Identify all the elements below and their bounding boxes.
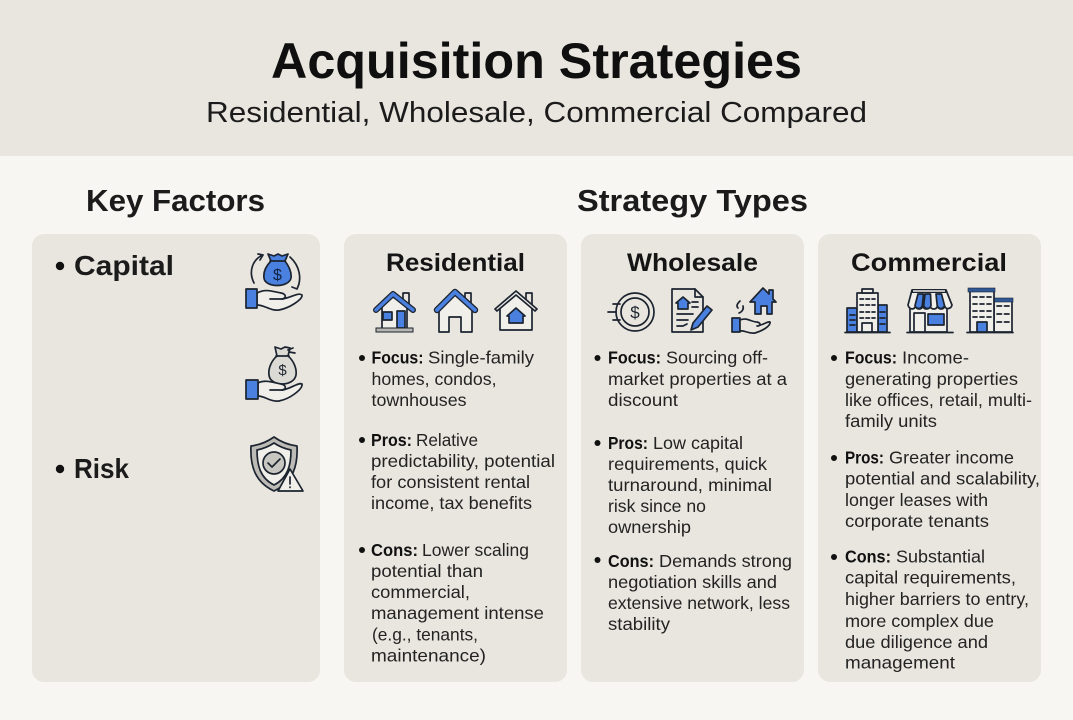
list: wholesale: ownership xyxy=(608,517,691,537)
icon: money bag over hand xyxy=(246,347,302,401)
list: residential: Focus: xyxy=(372,348,424,368)
factor: risk: Risk xyxy=(74,453,129,484)
list: commercial: Cons: xyxy=(845,546,891,566)
heading: residential: Residential xyxy=(386,249,525,277)
title: Acquisition Strategies xyxy=(271,33,802,89)
list: wholesale: requirements, quick xyxy=(608,454,767,474)
list: commercial: Focus: xyxy=(845,348,897,368)
list: commercial: management xyxy=(845,652,955,672)
list: wholesale: Sourcing off- xyxy=(666,348,768,368)
icon: house in hand xyxy=(732,288,776,333)
list: commercial: more complex due xyxy=(845,611,994,631)
factor: capital: Capital xyxy=(74,250,174,281)
subtitle: Residential, Wholesale, Commercial Compared xyxy=(206,97,867,129)
list: wholesale: turnaround, minimal xyxy=(608,475,772,495)
list: commercial: family units xyxy=(845,411,937,431)
list: commercial: Greater income xyxy=(889,448,1014,468)
list: residential: Cons: xyxy=(371,540,418,560)
list: residential: (e.g., tenants, xyxy=(372,624,478,644)
list: residential xyxy=(359,348,555,666)
icon: house three xyxy=(495,291,537,330)
icon: house one xyxy=(376,293,413,332)
list: residential: Relative xyxy=(416,430,478,450)
list: residential: management intense xyxy=(371,603,544,623)
list: residential: Single-family xyxy=(428,348,534,368)
list: wholesale: Demands strong xyxy=(659,551,792,571)
panel: wholesale xyxy=(581,234,804,682)
icon: apartment block xyxy=(967,288,1013,332)
panel: commercial xyxy=(818,234,1041,682)
list: residential: predictability, potential xyxy=(371,451,555,471)
panel: residential xyxy=(344,234,567,682)
list: residential: Lower scaling xyxy=(422,540,529,560)
list: commercial: Income- xyxy=(902,348,969,368)
list: residential: commercial, xyxy=(371,582,470,602)
list: commercial xyxy=(831,348,1040,672)
header band xyxy=(0,0,1073,156)
list: commercial: Pros: xyxy=(845,448,884,468)
list: wholesale: negotiation skills and xyxy=(608,572,777,592)
list: wholesale: discount xyxy=(608,390,678,410)
heading: wholesale: Wholesale xyxy=(627,249,758,277)
icon: contract with pen xyxy=(672,289,712,332)
list: residential: townhouses xyxy=(372,390,467,410)
list: commercial: higher barriers to entry, xyxy=(845,589,1029,609)
list: commercial: due diligence and xyxy=(845,632,988,652)
heading: strategy types: Strategy Types xyxy=(577,183,808,218)
list: residential: homes, condos, xyxy=(372,369,496,389)
list: commercial: Substantial xyxy=(896,546,985,566)
list: wholesale: market properties at a xyxy=(608,369,787,389)
list: residential: Pros: xyxy=(371,430,412,450)
list: commercial: longer leases with xyxy=(845,490,988,510)
icon: house two xyxy=(437,292,475,332)
heading: key factors: Key Factors xyxy=(86,183,265,218)
icon: money bag over hand: $ xyxy=(278,362,287,379)
panel: key factors xyxy=(32,234,320,682)
icon: shield with warning triangle xyxy=(251,437,303,491)
list: commercial: like offices, retail, multi- xyxy=(845,390,1032,410)
list: wholesale: Low capital xyxy=(653,433,743,453)
list: wholesale: Cons: xyxy=(608,551,654,571)
icon: money bag with cycle arrows over hand xyxy=(246,254,302,310)
icon: money bag with cycle arrows over hand: $ xyxy=(273,267,282,284)
list: commercial: corporate tenants xyxy=(845,511,989,531)
list: wholesale xyxy=(594,348,792,634)
list: wholesale: stability xyxy=(608,614,670,634)
list: residential: income, tax benefits xyxy=(371,493,532,513)
heading: commercial: Commercial xyxy=(851,249,1007,277)
icon: office tower xyxy=(845,289,890,332)
icon: storefront xyxy=(907,290,953,332)
list: commercial: capital requirements, xyxy=(845,568,1016,588)
list: commercial: generating properties xyxy=(845,369,1018,389)
icon: fast coin xyxy=(608,293,654,331)
list: wholesale: extensive network, less xyxy=(608,593,790,613)
list: residential: potential than xyxy=(371,561,483,581)
list: wholesale: Focus: xyxy=(608,348,661,368)
list: commercial: potential and scalability, xyxy=(845,468,1040,488)
list: residential: maintenance) xyxy=(371,646,486,666)
list: residential: for consistent rental xyxy=(371,472,530,492)
list: wholesale: risk since no xyxy=(608,496,706,516)
icon: fast coin: $ xyxy=(630,303,640,322)
list: wholesale: Pros: xyxy=(608,433,648,453)
